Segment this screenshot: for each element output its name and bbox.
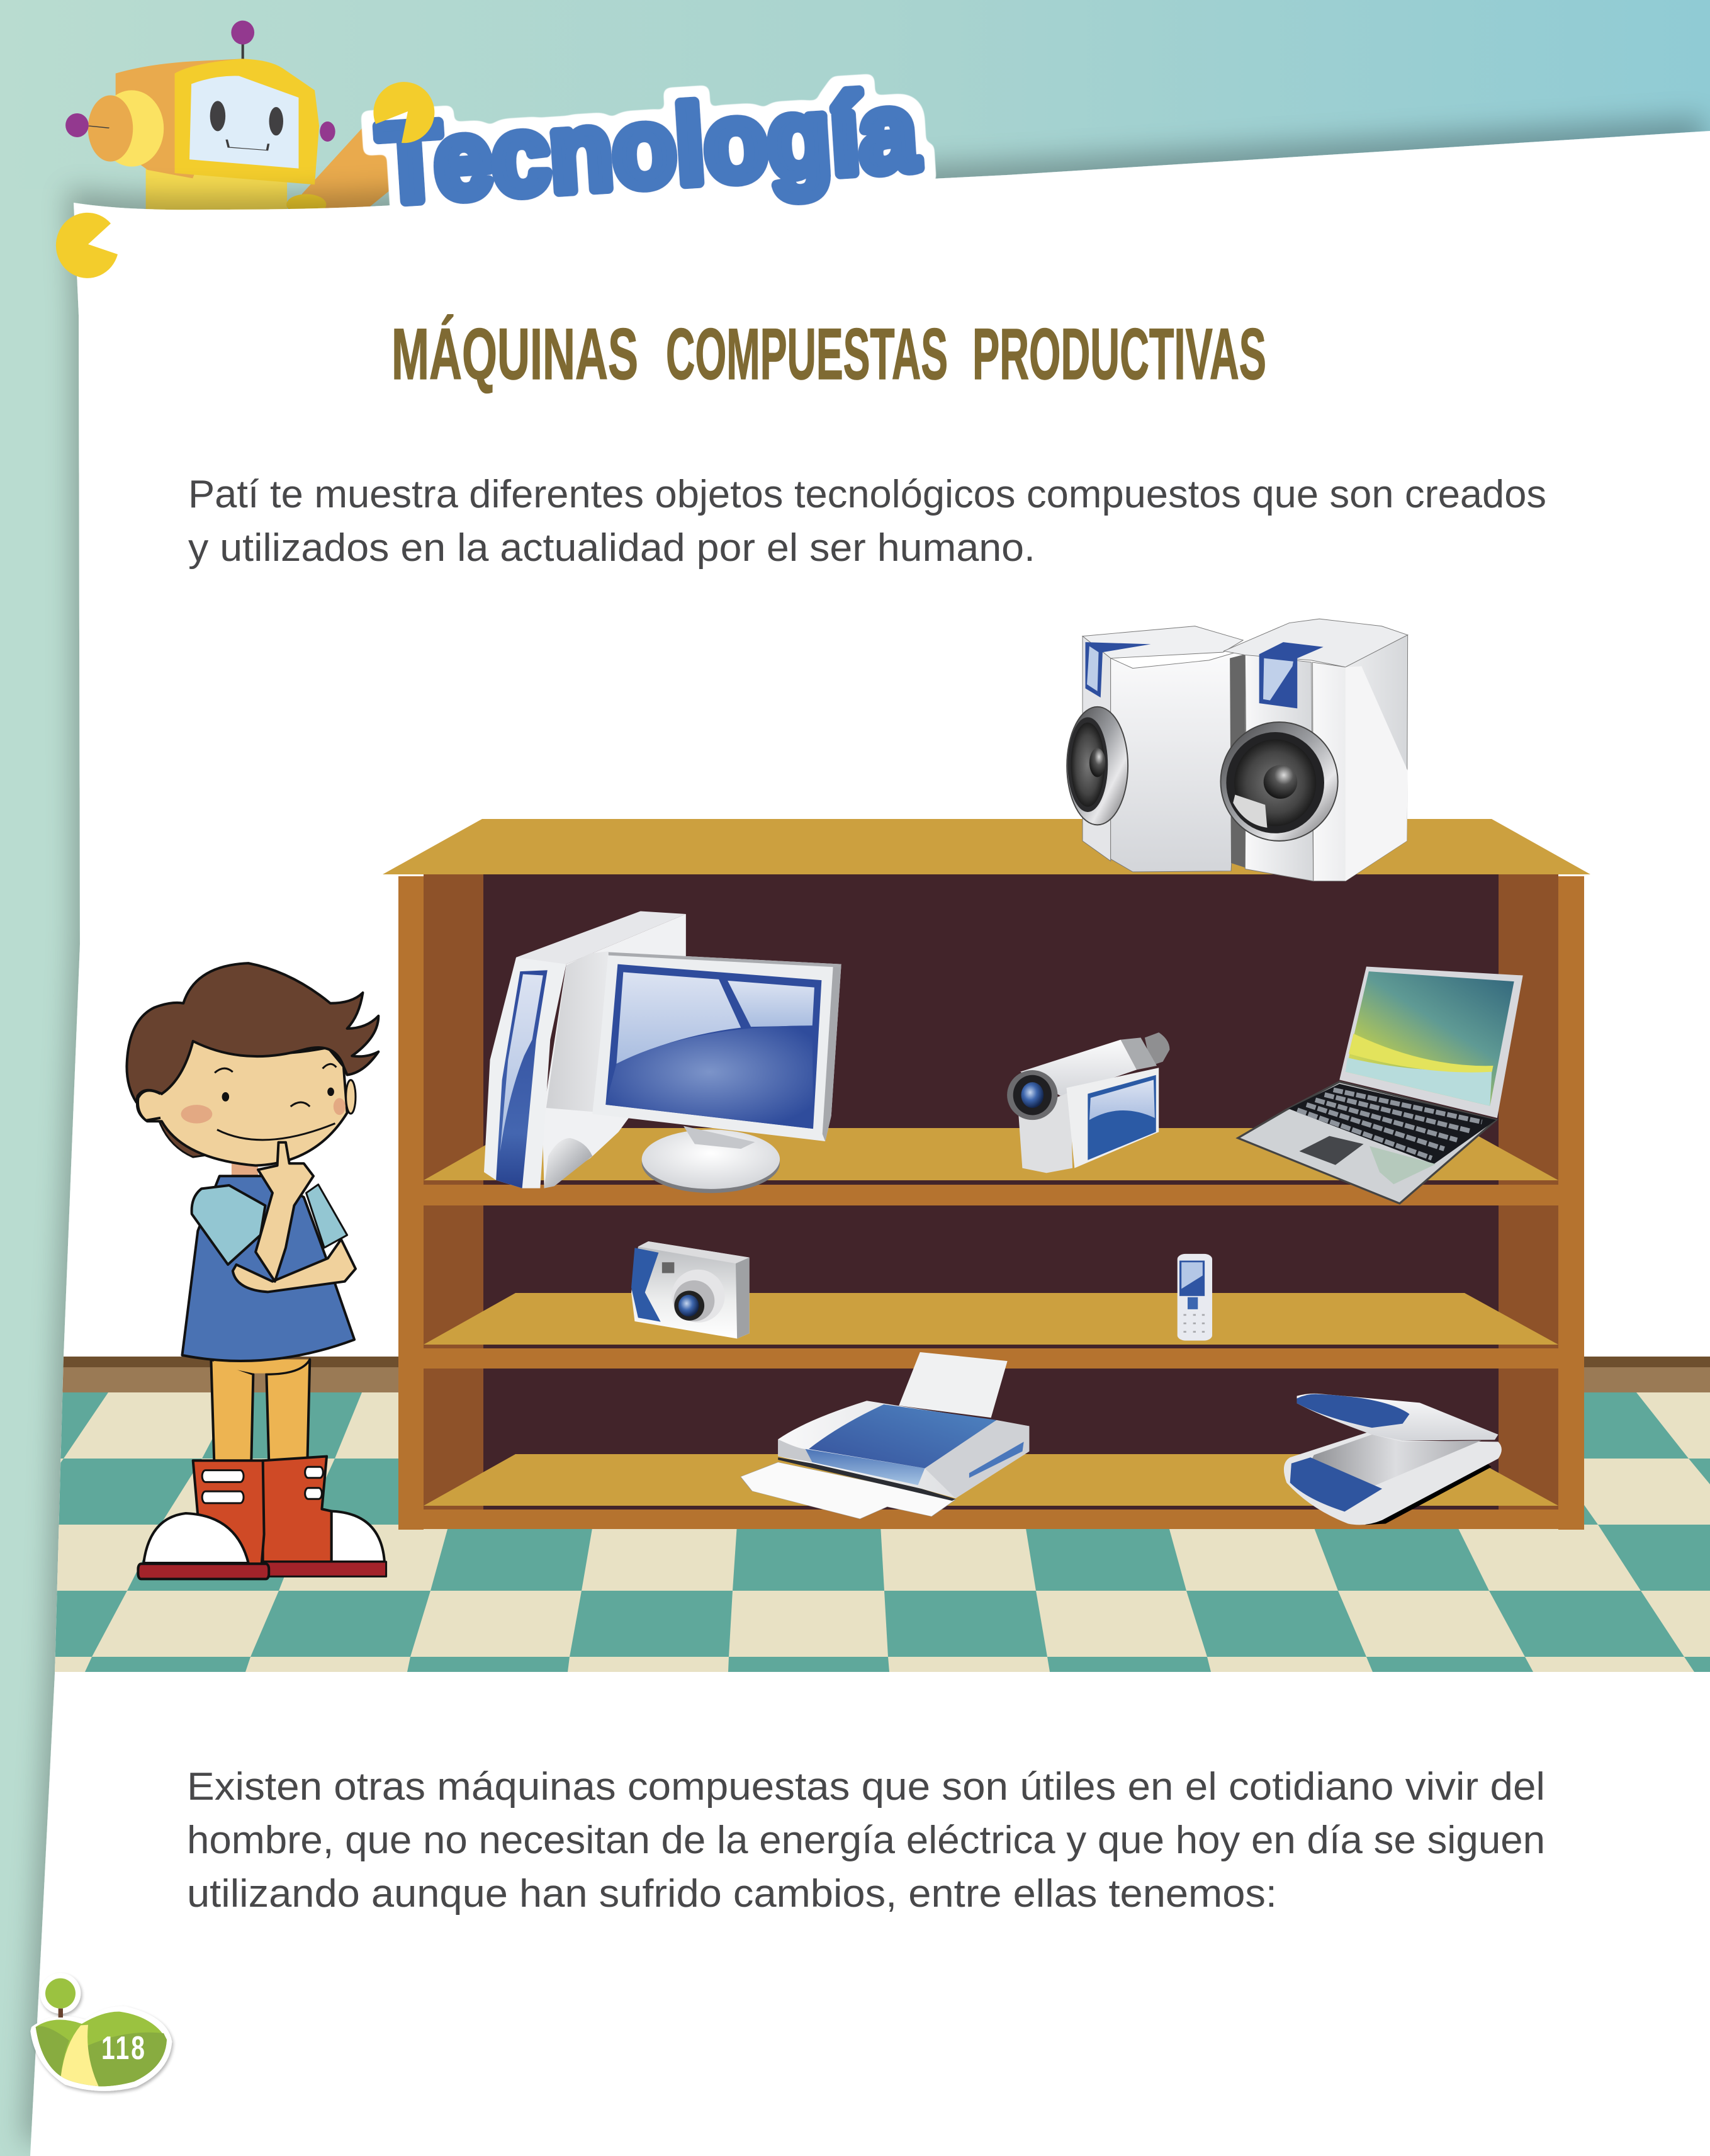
boot laces	[202, 1467, 323, 1503]
boy character Patí	[127, 963, 386, 1579]
left speaker	[1067, 626, 1243, 872]
robot mouth	[227, 140, 269, 150]
computer tower	[484, 911, 686, 1188]
speakers	[1067, 619, 1408, 881]
baseboard	[50, 1357, 1710, 1393]
boy legs	[211, 1360, 310, 1463]
video camera	[1007, 1032, 1169, 1173]
middle shelf	[424, 1293, 1558, 1369]
boy eyes and smile	[181, 1064, 346, 1140]
robot hand base	[286, 194, 326, 215]
intro paragraph: y utilizados en la actualidad por el ser humano.	[188, 526, 1035, 570]
printer	[741, 1352, 1029, 1519]
pacman corner clip	[56, 213, 118, 278]
closing paragraph: hombre, que no necesitan de la energía eléctrica y que hoy en día se siguen	[187, 1819, 1545, 1862]
boy sleeves	[192, 1185, 347, 1265]
cream floor	[38, 1392, 1710, 1672]
robot head back	[116, 59, 243, 178]
page number badge	[30, 1973, 172, 2091]
mobile phone	[1178, 1254, 1212, 1341]
left teal margin	[0, 189, 82, 2156]
shelf back panel	[483, 874, 1499, 1510]
robot screen face	[189, 76, 298, 169]
heading: PRODUCTIVAS	[972, 314, 1266, 395]
shelf top board	[383, 819, 1590, 874]
boy arms	[233, 1143, 356, 1292]
computer	[484, 911, 841, 1193]
section title: Tecnología: Tecnología	[375, 69, 921, 227]
scanner	[1284, 1394, 1502, 1525]
laptop	[1238, 967, 1523, 1204]
boot toes	[143, 1511, 385, 1563]
heading: MÁQUINAS	[391, 314, 638, 395]
robot eyes	[210, 101, 283, 135]
boy boots	[193, 1457, 332, 1564]
boy neck	[232, 1163, 258, 1180]
right speaker	[1220, 619, 1408, 881]
robot antenna	[231, 21, 254, 60]
boot soles	[138, 1562, 386, 1579]
heading: COMPUESTAS	[666, 314, 948, 395]
shelf inner sides	[424, 874, 1558, 1510]
robot ear	[65, 90, 164, 167]
lower shelf	[424, 1454, 1558, 1529]
shelf outer posts	[398, 876, 1584, 1530]
intro paragraph: Patí te muestra diferentes objetos tecnológicos compuestos que son creados	[188, 473, 1546, 516]
upper shelf	[424, 1128, 1558, 1205]
monitor stand	[642, 1126, 780, 1193]
boy left ear	[138, 1090, 160, 1120]
boy shirt	[182, 1176, 354, 1361]
badge hills and tree	[30, 1973, 172, 2091]
teal floor tiles	[16, 1392, 1710, 1672]
robot hand pacman	[373, 82, 434, 143]
robot arm	[302, 113, 417, 210]
wooden shelf unit	[383, 819, 1590, 1530]
closing paragraph: Existen otras máquinas compuestas que son útiles en el cotidiano vivir del	[187, 1765, 1545, 1809]
intro paragraph	[188, 473, 1546, 570]
boy right ear	[346, 1080, 356, 1114]
boy hair	[127, 963, 378, 1102]
heading	[391, 314, 1266, 395]
monitor screen	[592, 952, 841, 1141]
room scene: wall base and checker floor	[16, 1357, 1710, 1672]
robot right knob	[320, 121, 335, 142]
robot mascot	[65, 21, 417, 215]
boy face	[137, 1041, 347, 1166]
closing paragraph: utilizando aunque han sufrido cambios, entre ellas tenemos:	[187, 1872, 1277, 1916]
boy hair back	[159, 1113, 208, 1157]
digital camera	[631, 1241, 750, 1339]
closing paragraph	[187, 1765, 1545, 1916]
page number: 118	[101, 2029, 147, 2066]
robot body	[146, 169, 287, 211]
robot head front	[175, 59, 319, 184]
